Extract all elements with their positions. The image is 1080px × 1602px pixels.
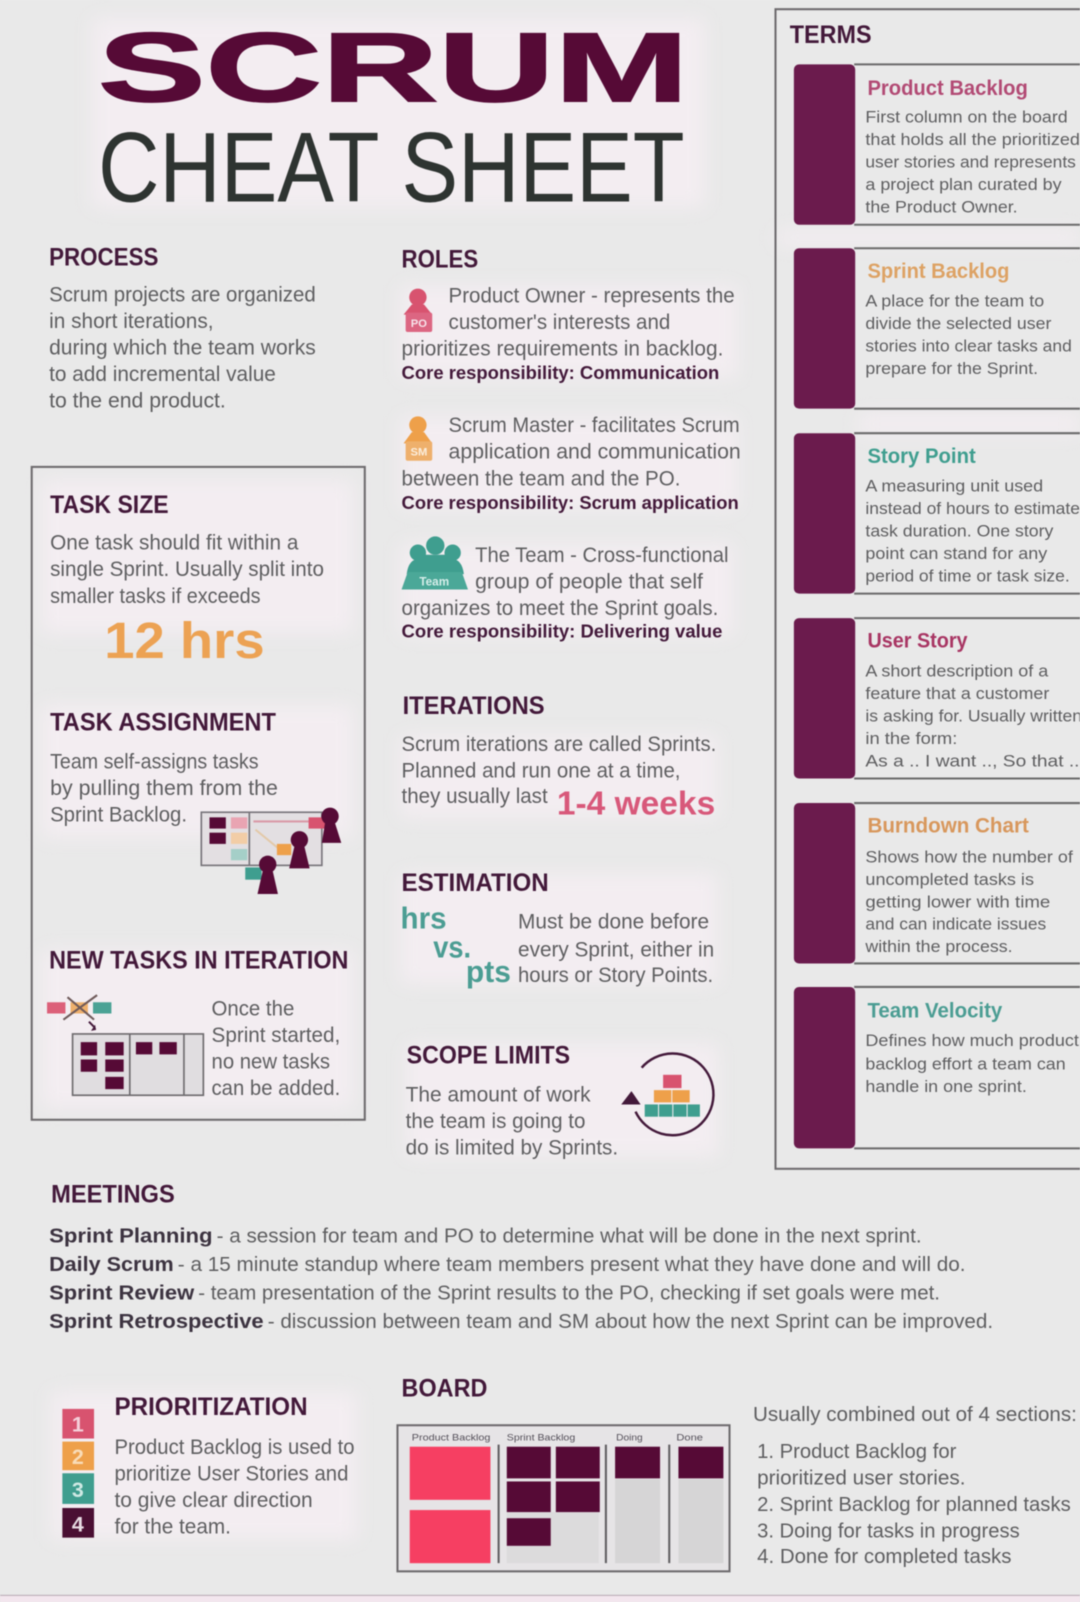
panel: meetings: - discussion between team and SM about how the next Sprint can be improved. [268, 1311, 993, 1333]
panel: scope limits: the team is going to [406, 1110, 585, 1133]
product owner text: Core responsibility: Communication [402, 362, 719, 383]
new tasks in iteration: can be added. [212, 1077, 340, 1100]
team text: The Team - Cross-functional [475, 544, 729, 567]
panel: meetings: Daily Scrum [49, 1254, 174, 1276]
term: burndown chart: Shows how the number of [865, 847, 1073, 866]
panel: process [49, 245, 316, 413]
term: story point: Story Point [867, 444, 976, 468]
board sections list: 4. Done for completed tasks [757, 1546, 1012, 1568]
icon: team [402, 536, 468, 590]
panel: task box [32, 467, 365, 1120]
task size: smaller tasks if exceeds [50, 585, 261, 608]
scrum master text: between the team and the PO. [402, 467, 680, 490]
icon: team pulling tasks from board [201, 808, 341, 894]
panel: meetings: Sprint Review [49, 1283, 194, 1305]
priority squares: 2 [72, 1445, 84, 1469]
panel: estimation: ESTIMATION [402, 870, 549, 897]
board diagram: Doing [616, 1433, 643, 1443]
panel: estimation: Must be done before [518, 911, 709, 934]
icon: scrum master: SM [411, 447, 427, 459]
term: team velocity [794, 987, 1080, 1148]
term: user story: in the form: [865, 729, 957, 748]
panel: meetings: - a session for team and PO to determine what will be done in the next sprint. [217, 1225, 922, 1247]
task size: One task should fit within a [50, 532, 299, 555]
term: sprint backlog: A place for the team to [865, 292, 1044, 311]
new tasks in iteration [49, 948, 348, 1100]
icon: scope cycle with stacked tasks [621, 1054, 713, 1135]
board sections list: 2. Sprint Backlog for planned tasks [757, 1494, 1071, 1516]
priority squares: 4 [72, 1513, 84, 1537]
icon: team: Team [419, 575, 449, 588]
task assignment: TASK ASSIGNMENT [50, 710, 276, 737]
team text: group of people that self [475, 570, 703, 593]
panel: process: in short iterations, [49, 310, 214, 333]
icon: product owner [404, 289, 432, 332]
panel: prioritization [62, 1394, 355, 1539]
task assignment: by pulling them from the [50, 777, 278, 800]
term: story point: instead of hours to estimate [865, 499, 1080, 518]
panel: iterations [402, 693, 716, 822]
new tasks in iteration: no new tasks [212, 1051, 330, 1074]
panel: estimation [401, 870, 714, 989]
term: burndown chart: within the process. [864, 937, 1013, 956]
term: story point: period of time or task size. [865, 566, 1070, 585]
title: SCRUM [98, 12, 689, 122]
term: story point [794, 433, 1080, 594]
panel: estimation: hours or Story Points. [518, 964, 713, 987]
panel: process: during which the team works [49, 337, 316, 360]
panel: scope limits: The amount of work [406, 1083, 591, 1106]
panel: prioritization: Product Backlog is used to [114, 1436, 355, 1459]
title [98, 12, 689, 223]
task size [50, 492, 324, 669]
panel: terms [775, 9, 1080, 1169]
term: story point: task duration. One story [865, 521, 1054, 540]
team text: Core responsibility: Delivering value [402, 621, 722, 642]
term: user story [794, 618, 1080, 779]
panel: process: Scrum projects are organized [49, 283, 316, 306]
panel: meetings: Sprint Planning [49, 1225, 213, 1247]
term: team velocity: backlog effort a team can [865, 1055, 1066, 1074]
term: product backlog: the Product Owner. [865, 198, 1018, 217]
panel: prioritization: for the team. [114, 1516, 231, 1539]
term: user story: As a .. I want .., So that .. . [865, 751, 1080, 770]
term: burndown chart: Burndown Chart [867, 814, 1029, 838]
priority squares [62, 1409, 94, 1538]
scrum master text: application and communication [449, 441, 741, 464]
term: sprint backlog: prepare for the Sprint. [865, 359, 1038, 378]
new tasks in iteration: NEW TASKS IN ITERATION [49, 948, 348, 975]
panel: roles [402, 247, 741, 642]
scrum master text: Scrum Master - facilitates Scrum [449, 414, 740, 437]
board diagram: Product Backlog [412, 1433, 490, 1443]
panel: iterations: ITERATIONS [403, 693, 545, 720]
term: burndown chart: and can indicate issues [865, 915, 1046, 934]
term: burndown chart: uncompleted tasks is [865, 870, 1034, 889]
term: story point: point can stand for any [865, 544, 1048, 563]
icon: blocked new task and board [47, 995, 203, 1095]
priority squares: 1 [72, 1412, 84, 1436]
panel: estimation: vs. [433, 930, 471, 964]
panel: process: to the end product. [49, 390, 226, 413]
product owner text: prioritizes requirements in backlog. [402, 338, 723, 361]
panel: terms: TERMS [790, 22, 872, 49]
term: sprint backlog: divide the selected user [865, 314, 1052, 333]
task assignment: Sprint Backlog. [50, 803, 187, 826]
product owner text [402, 284, 735, 383]
board heading: BOARD [402, 1376, 487, 1403]
panel: roles: ROLES [402, 247, 478, 274]
term: story point: A measuring unit used [865, 476, 1043, 495]
term: burndown chart: getting lower with time [865, 892, 1050, 911]
product owner text: customer's interests and [449, 311, 670, 334]
board sections list: 1. Product Backlog for [757, 1441, 957, 1463]
term: sprint backlog [794, 248, 1080, 409]
panel: prioritization: to give clear direction [114, 1489, 313, 1512]
board sections list [753, 1404, 1077, 1568]
panel: prioritization: PRIORITIZATION [114, 1394, 308, 1421]
task size: 12 hrs [104, 612, 265, 669]
panel: meetings: MEETINGS [51, 1182, 175, 1209]
term: user story: A short description of a [865, 661, 1049, 680]
title: CHEAT SHEET [98, 112, 685, 223]
board diagram: Sprint Backlog [507, 1433, 575, 1443]
task assignment [50, 710, 278, 826]
term: product backlog: First column on the board [865, 108, 1068, 127]
panel: iterations: they usually last [402, 785, 548, 808]
priority squares: 3 [72, 1478, 84, 1502]
board diagram: Done [676, 1433, 703, 1443]
scrum master text [402, 414, 741, 513]
new tasks in iteration: Once the [212, 998, 294, 1021]
term: product backlog [794, 64, 1080, 225]
task size: TASK SIZE [50, 492, 169, 519]
product owner text: Product Owner - represents the [449, 284, 735, 307]
panel: meetings [49, 1182, 993, 1333]
panel: iterations: Scrum iterations are called Sprints. [402, 733, 716, 756]
term: product backlog: that holds all the prioritized [865, 130, 1080, 149]
panel: meetings: - a 15 minute standup where team members present what they have done and will do. [178, 1254, 966, 1276]
term: user story: is asking for. Usually written [865, 706, 1080, 725]
board sections list: Usually combined out of 4 sections: [753, 1404, 1077, 1426]
panel: process: to add incremental value [49, 363, 276, 386]
term: sprint backlog: stories into clear tasks and [865, 336, 1072, 355]
new tasks in iteration: Sprint started, [212, 1024, 340, 1047]
panel: meetings: - team presentation of the Sprint results to the PO, checking if set goals were met. [198, 1283, 940, 1305]
term: team velocity: Team Velocity [867, 999, 1002, 1023]
scrum master text: Core responsibility: Scrum application [402, 492, 739, 513]
task assignment: Team self-assigns tasks [50, 750, 259, 773]
term: burndown chart [794, 803, 1080, 963]
term: sprint backlog: Sprint Backlog [867, 259, 1009, 283]
task size: single Sprint. Usually split into [50, 558, 324, 581]
board diagram [397, 1425, 730, 1571]
team text: organizes to meet the Sprint goals. [402, 597, 718, 620]
icon: scrum master [404, 416, 432, 461]
term: product backlog: a project plan curated by [865, 175, 1062, 194]
panel: scope limits: SCOPE LIMITS [407, 1043, 570, 1070]
term: team velocity: Defines how much product [865, 1031, 1079, 1050]
panel: prioritization: prioritize User Stories and [114, 1462, 348, 1485]
board sections list: prioritized user stories. [757, 1468, 966, 1490]
panel: iterations: Planned and run one at a time, [402, 760, 680, 783]
panel: estimation: pts [466, 955, 511, 989]
term: user story: User Story [867, 629, 968, 653]
panel: meetings: Sprint Retrospective [49, 1311, 264, 1333]
term: product backlog: Product Backlog [867, 76, 1028, 100]
panel: process: PROCESS [49, 245, 158, 272]
team text [402, 544, 729, 642]
icon: product owner: PO [411, 318, 427, 330]
panel: estimation: hrs [401, 902, 447, 936]
term: product backlog: user stories and represents [865, 153, 1076, 172]
term: user story: feature that a customer [865, 684, 1050, 703]
panel: scope limits [406, 1043, 618, 1160]
board sections list: 3. Doing for tasks in progress [757, 1521, 1020, 1543]
panel: estimation: every Sprint, either in [518, 938, 714, 961]
term: team velocity: handle in one sprint. [865, 1077, 1027, 1096]
panel: iterations: 1-4 weeks [557, 784, 715, 822]
panel: scope limits: do is limited by Sprints. [406, 1137, 618, 1160]
